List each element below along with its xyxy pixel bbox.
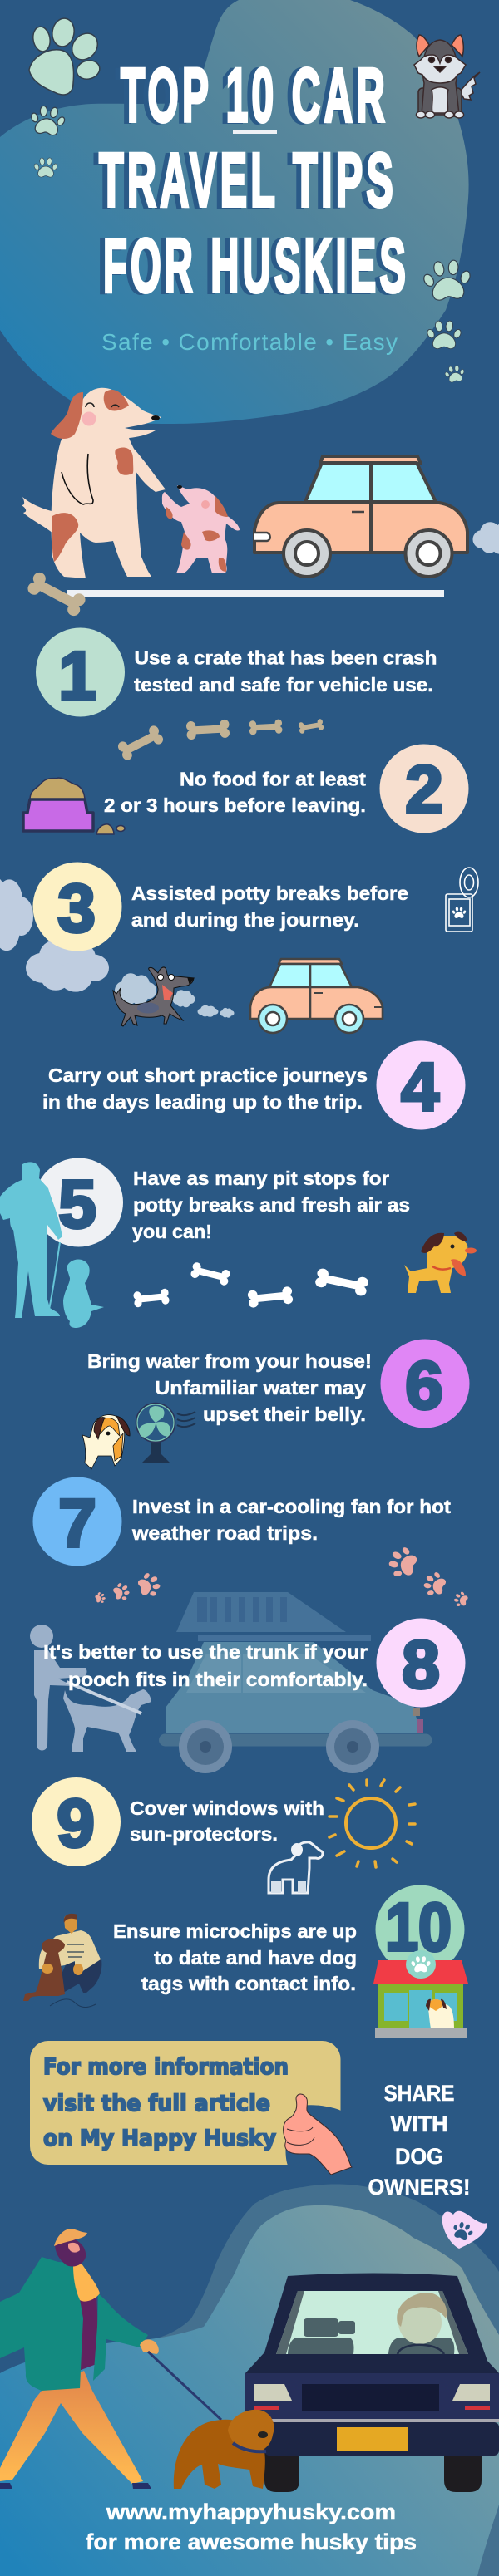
- hat: [54, 2229, 87, 2246]
- number badge 8: 8: [402, 1627, 440, 1703]
- number badge 4: [376, 1040, 466, 1130]
- bumper: [264, 2422, 499, 2456]
- clouds left: [0, 875, 109, 992]
- share text: [368, 2081, 471, 2200]
- heart paw: [442, 2211, 487, 2249]
- number badge 2: 2: [405, 752, 443, 828]
- stripes: [67, 1944, 84, 1957]
- number badge 6: [381, 1340, 469, 1428]
- tip 5 text: [132, 1168, 410, 1242]
- tip 7: [33, 1477, 451, 1566]
- paw prints top right: [421, 258, 474, 383]
- tip 2 text: 2 or 3 hours before leaving.: [104, 794, 366, 816]
- footer text: for more awesome husky tips: [86, 2529, 417, 2554]
- tip 9 text: Cover windows with: [130, 1797, 324, 1819]
- tip 6 text: upset their belly.: [203, 1404, 366, 1425]
- person with dog silhouette: [30, 1625, 151, 1752]
- number plate: [337, 2427, 408, 2451]
- pants: [60, 1959, 101, 1993]
- indicators: [254, 2406, 490, 2410]
- tip 5 text: Have as many pit stops for: [133, 1168, 389, 1189]
- car: [254, 456, 467, 577]
- tip 3: [33, 863, 408, 951]
- small pink dog: [162, 485, 240, 573]
- tip 7 text: [131, 1496, 451, 1544]
- tip 9 text: [130, 1797, 324, 1845]
- number badge 5: [34, 1158, 123, 1246]
- grille: [302, 2384, 439, 2411]
- tip 9: [32, 1777, 324, 1866]
- callout text: on My Happy Husky: [43, 2126, 276, 2151]
- brown dog: [174, 2410, 274, 2489]
- callout text: For more information: [43, 2054, 289, 2080]
- number badge 3: 3: [57, 871, 96, 946]
- share text: DOG: [395, 2144, 443, 2169]
- header blob: [0, 0, 469, 424]
- tip 3 text: and during the journey.: [131, 909, 359, 931]
- tip 4 text: [42, 1064, 368, 1113]
- shoes: [0, 2483, 151, 2489]
- headlights: [254, 2384, 490, 2401]
- tyres: [264, 2451, 482, 2492]
- icon: food bowl: [23, 778, 125, 834]
- tip 2 text: [104, 768, 366, 816]
- tip 5: [34, 1158, 410, 1246]
- icon: small dog: [82, 1415, 130, 1469]
- tip 7 text: weather road trips.: [131, 1522, 318, 1544]
- pink paw prints: [94, 1543, 470, 1609]
- tip 5 text: you can!: [132, 1221, 212, 1242]
- icon: running dog: [113, 967, 194, 1026]
- driver: [398, 2301, 442, 2344]
- footer blob outer: [153, 2184, 499, 2576]
- man crouching with dog: [23, 1914, 101, 2008]
- icon: sun: [329, 1780, 415, 1867]
- icon: yellow dog: [404, 1231, 477, 1293]
- icon: husky: [414, 35, 480, 118]
- tip 2: [104, 745, 469, 833]
- tip 1: [36, 628, 437, 716]
- number badge 7: 7: [58, 1486, 96, 1561]
- faded car: [159, 1592, 432, 1773]
- silhouette: man and dog: [0, 1162, 104, 1328]
- subtitle: Safe • Comfortable • Easy: [101, 329, 398, 355]
- tip 1 text: Use a crate that has been crash: [135, 646, 437, 668]
- sweater: [39, 1930, 101, 1972]
- tip 8: [43, 1619, 466, 1707]
- icon: thumbs up: [284, 2094, 352, 2175]
- side pillars: [276, 2291, 468, 2354]
- icon: desk fan: [136, 1404, 195, 1463]
- number badge 9: 9: [57, 1786, 95, 1861]
- man walking dog: [0, 2229, 221, 2489]
- tip 8 text: It's better to use the trunk if your: [43, 1641, 368, 1663]
- car front: [245, 2274, 499, 2492]
- tip 1 text: tested and safe for vehicle use.: [134, 674, 433, 696]
- tip 3 text: Assisted potty breaks before: [131, 882, 408, 904]
- legs: [0, 2371, 143, 2484]
- paw prints top left: [27, 17, 103, 177]
- share text: WITH: [391, 2111, 447, 2136]
- number badge 10: 10: [385, 1890, 452, 1965]
- tip 6 text: [87, 1350, 372, 1425]
- number badge 3: [33, 863, 121, 951]
- tip 4 text: Carry out short practice journeys: [48, 1064, 368, 1086]
- seats: [288, 2338, 454, 2354]
- icon: poop bag dispenser: [446, 868, 478, 932]
- tip 6: [87, 1340, 469, 1428]
- white bones row: [133, 1261, 369, 1308]
- number badge 8: [376, 1619, 466, 1707]
- icon: white outline dog: [269, 1842, 323, 1893]
- car small: [250, 959, 383, 1033]
- tip 10 text: tags with contact info.: [141, 1973, 356, 1994]
- tip 10: [113, 1885, 464, 1994]
- clouds behind running dog: [115, 973, 235, 1018]
- scarf: [73, 2264, 100, 2302]
- tip 10 text: Ensure microchips are up: [113, 1920, 357, 1942]
- tip 8 text: pooch fits in their comfortably.: [68, 1669, 368, 1690]
- number badge 7: [33, 1477, 121, 1566]
- head and beard: [55, 2238, 86, 2267]
- icon: bone: [26, 570, 87, 618]
- footer blob inner: [0, 2205, 499, 2576]
- tip 4: [42, 1040, 466, 1130]
- tip 5 text: potty breaks and fresh air as: [133, 1194, 410, 1216]
- tip 2 text: No food for at least: [180, 768, 366, 789]
- windshield: [276, 2291, 468, 2354]
- grille panel: [245, 2373, 499, 2420]
- number badge 9: [32, 1777, 121, 1866]
- leash: [148, 2352, 221, 2420]
- hand: [140, 2339, 159, 2354]
- number badge 2: [379, 745, 469, 833]
- number badge 5: 5: [58, 1167, 96, 1242]
- tip 4 text: in the days leading up to the trip.: [42, 1091, 363, 1113]
- footer text: [86, 2500, 417, 2554]
- tip 10 text: [113, 1920, 357, 1994]
- tip 10 text: to date and have dog: [154, 1947, 357, 1969]
- tip 6 text: Unfamiliar water may: [155, 1377, 366, 1399]
- bones row: [116, 719, 324, 762]
- jacket: [0, 2257, 148, 2391]
- road line: [67, 590, 444, 597]
- callout text: visit the full article: [43, 2091, 270, 2116]
- title: [94, 53, 409, 309]
- icon: pet shop: [373, 1950, 468, 2038]
- cloud behind car: [472, 522, 499, 554]
- shirt: [77, 2293, 99, 2372]
- tip 6 text: Bring water from your house!: [87, 1350, 372, 1372]
- number badge 6: 6: [405, 1348, 443, 1423]
- share text: SHARE: [384, 2081, 454, 2106]
- number badge 1: [36, 628, 125, 716]
- share text: OWNERS!: [368, 2175, 471, 2200]
- cabin: [245, 2274, 499, 2420]
- head: [64, 1915, 77, 1934]
- big dog: [22, 388, 166, 578]
- tip 7 text: Invest in a car-cooling fan for hot: [132, 1496, 451, 1517]
- tip 3 text: [131, 882, 408, 931]
- tip 8 text: [43, 1641, 368, 1690]
- callout text: [43, 2054, 289, 2151]
- footer text: www.myhappyhusky.com: [106, 2500, 396, 2524]
- tip 9 text: sun-protectors.: [130, 1823, 278, 1845]
- callout: more information: [30, 2041, 341, 2165]
- number badge 1: 1: [58, 638, 96, 714]
- number badge 4: 4: [401, 1050, 439, 1125]
- tip 1 text: [134, 646, 437, 696]
- dog: [23, 1939, 65, 2001]
